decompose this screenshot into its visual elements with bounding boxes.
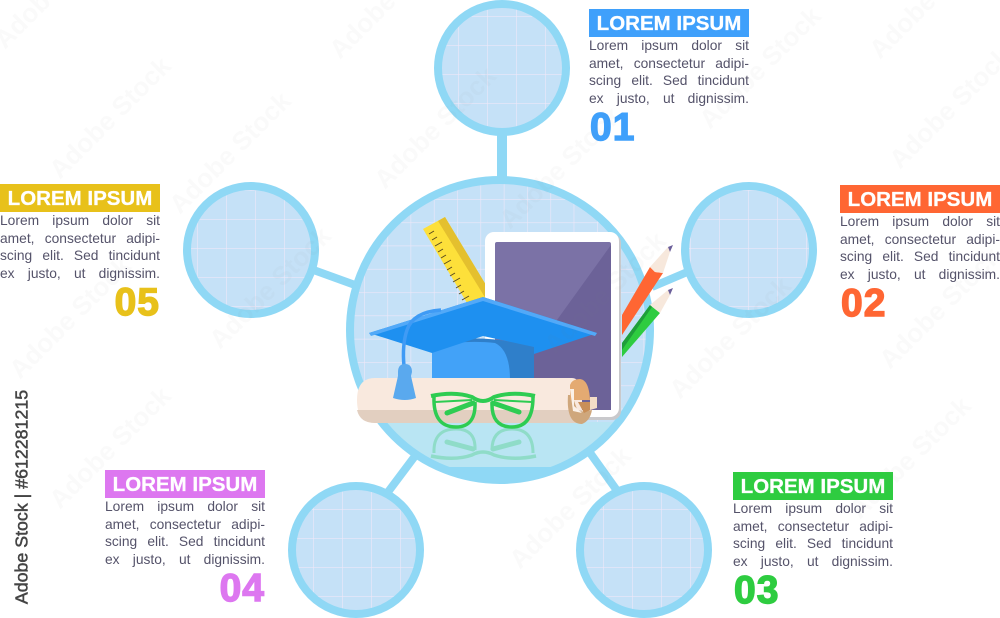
number 04: 04 — [220, 567, 265, 610]
heading 02: LOREM IPSUM — [848, 188, 992, 211]
body text 04: ex justo, ut dignissim. — [105, 552, 265, 567]
icon: reflection of glasses — [431, 429, 536, 458]
body text 02 — [840, 214, 1000, 282]
circle 05 — [187, 186, 315, 314]
body text 04: Lorem ipsum dolor sit — [105, 499, 265, 514]
watermarks: Adobe Stock — [538, 225, 672, 359]
watermarks: Adobe Stock — [493, 100, 627, 234]
watermarks: Adobe Stock — [843, 390, 977, 524]
body text 02: Lorem ipsum dolor sit — [840, 214, 1000, 229]
watermarks: Adobe Stock — [368, 60, 502, 194]
central circle — [340, 180, 660, 497]
watermarks: Adobe Stock — [163, 85, 297, 219]
icon: glasses — [431, 394, 535, 427]
body text 01: amet, consectetur adipi- — [589, 56, 749, 71]
body text 02: ex justo, ut dignissim. — [840, 267, 1000, 282]
circle 02 — [685, 186, 813, 314]
body text 04: amet, consectetur adipi- — [105, 517, 265, 532]
connector lines — [308, 128, 692, 492]
body text 04: scing elit. Sed tincidunt — [105, 534, 265, 549]
body text 03 — [733, 501, 893, 569]
text block 05 — [0, 184, 160, 324]
watermarks: Adobe Stock — [3, 250, 137, 384]
watermarks: Adobe Stock — [663, 270, 797, 404]
icon: tablet — [485, 232, 621, 420]
heading 05: LOREM IPSUM — [8, 187, 152, 210]
network diagram — [183, 0, 817, 618]
text block 03 — [733, 472, 893, 612]
heading 01: LOREM IPSUM — [597, 12, 741, 35]
icon: tassel — [393, 364, 416, 400]
number 01: 01 — [590, 106, 635, 149]
body text 03: amet, consectetur adipi- — [733, 519, 893, 534]
text block 04 — [105, 470, 265, 610]
watermarks: Adobe Stock — [503, 440, 637, 574]
body text 05 — [0, 213, 160, 281]
text block 02 — [840, 185, 1000, 325]
body text 01: scing elit. Sed tincidunt — [589, 73, 749, 88]
icon: diploma scroll — [357, 378, 597, 424]
body text 03: scing elit. Sed tincidunt — [733, 536, 893, 551]
circle 04 — [292, 486, 420, 614]
circle 01 — [438, 4, 566, 132]
watermarks: Adobe Stock — [43, 380, 177, 514]
text block 01 — [589, 9, 749, 149]
heading 03: LOREM IPSUM — [741, 475, 885, 498]
body text 05: Lorem ipsum dolor sit — [0, 213, 160, 228]
watermarks: Adobe Stock — [203, 220, 337, 354]
circle 03 — [580, 486, 708, 614]
body text 03: Lorem ipsum dolor sit — [733, 501, 893, 516]
icon: pencils — [622, 245, 673, 357]
number 02: 02 — [841, 282, 886, 325]
body text 01: ex justo, ut dignissim. — [589, 91, 749, 106]
body text 01: Lorem ipsum dolor sit — [589, 38, 749, 53]
icon: graduation cap — [369, 297, 597, 380]
body text 02: scing elit. Sed tincidunt — [840, 249, 1000, 264]
icon: ruler — [423, 217, 492, 308]
body text 02: amet, consectetur adipi- — [840, 232, 1000, 247]
body text 05: amet, consectetur adipi- — [0, 231, 160, 246]
stock credit: Adobe Stock | #612281215 — [12, 390, 32, 604]
body text 05: scing elit. Sed tincidunt — [0, 248, 160, 263]
watermarks: Adobe Stock — [693, 0, 827, 134]
heading 04: LOREM IPSUM — [113, 473, 257, 496]
body text 01 — [589, 38, 749, 106]
body text 03: ex justo, ut dignissim. — [733, 554, 893, 569]
number 03: 03 — [734, 569, 779, 612]
body text 05: ex justo, ut dignissim. — [0, 266, 160, 281]
watermarks: Adobe Stock — [43, 50, 177, 184]
number 05: 05 — [115, 281, 160, 324]
body text 04 — [105, 499, 265, 567]
